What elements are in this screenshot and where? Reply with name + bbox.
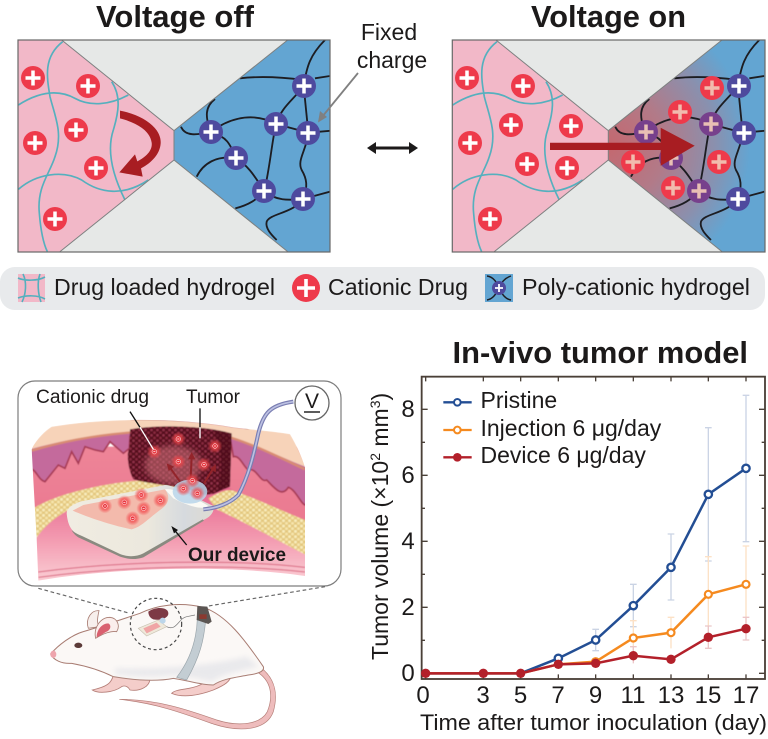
legend text: drug loaded hydrogel: Drug loaded hydrogel	[54, 274, 275, 300]
fixed charges	[199, 74, 320, 211]
y axis title: mm	[367, 408, 393, 453]
backpack unit	[197, 606, 212, 624]
fat layer left	[33, 481, 187, 540]
ears	[87, 611, 99, 628]
x axis tick labels	[416, 682, 759, 709]
panel: voltage off channel	[18, 40, 332, 252]
leader lines	[130, 408, 200, 545]
hind foot	[172, 675, 232, 696]
y axis title: )	[367, 393, 393, 400]
panel: voltage on channel	[452, 40, 766, 252]
chart legend labels: Injection 6 μg/day	[480, 415, 662, 441]
x axis title: Time after tumor inoculation (day)	[420, 710, 767, 735]
icon: drug loaded hydrogel	[18, 274, 45, 302]
line chart: tumor volume	[367, 377, 767, 735]
fixed charges	[634, 74, 756, 211]
mouse illustration	[38, 587, 325, 729]
body	[51, 605, 264, 685]
legend bar	[0, 267, 765, 310]
cationic drugs left	[455, 66, 583, 231]
x axis tick labels: 11	[621, 682, 645, 709]
label: our device: Our device	[188, 545, 286, 566]
device body	[67, 485, 214, 557]
muscle layer	[36, 487, 305, 580]
arrow: reversible	[367, 142, 418, 154]
x axis tick labels: 3	[476, 682, 490, 709]
legend text: poly-cationic hydrogel: Poly-cationic hydrogel	[522, 274, 750, 300]
tumor mass	[128, 426, 232, 495]
series: pristine	[426, 465, 750, 673]
tail	[119, 667, 276, 729]
body shade	[115, 657, 258, 682]
wire to voltage source	[203, 402, 293, 509]
outer skin	[30, 420, 307, 467]
eye and nose	[74, 643, 82, 648]
label: tumor: Tumor	[186, 387, 241, 408]
y axis title: 3	[367, 400, 383, 408]
legend text: cationic drug: Cationic Drug	[328, 274, 468, 300]
device top reservoir	[73, 489, 168, 529]
icon: voltmeter: V	[305, 390, 319, 413]
panel: implanted device inset	[18, 381, 341, 586]
label: cationic drug: Cationic drug	[36, 387, 149, 408]
icon: cationic drug	[292, 274, 320, 302]
release arrowheads	[167, 452, 216, 472]
x axis tick labels: 15	[695, 682, 721, 709]
y axis tick labels: 0	[401, 660, 415, 687]
chart legend labels: Device 6 μg/day	[480, 442, 646, 468]
title: voltage off: Voltage off	[96, 0, 255, 34]
arrow: drug flow	[550, 128, 695, 166]
arrowhead: device leader	[171, 526, 178, 533]
harness strap	[177, 618, 206, 680]
bottom tissue stripes	[38, 562, 305, 577]
y axis tick labels: 2	[401, 594, 415, 621]
series: injection	[426, 581, 749, 673]
drug particles	[98, 432, 222, 526]
dermis layer	[30, 447, 310, 527]
label: fixed charge	[357, 19, 427, 73]
x axis tick labels: 0	[416, 682, 430, 709]
dashed circle	[130, 598, 182, 650]
y axis tick labels	[401, 396, 415, 687]
error bars	[592, 395, 749, 663]
x axis tick labels: 5	[514, 682, 527, 709]
y axis title: 2	[367, 453, 383, 461]
arrow: fixed charge leader	[318, 73, 358, 122]
chart legend labels: Pristine	[480, 387, 557, 413]
chart legend labels	[480, 387, 662, 468]
x axis tick labels: 13	[658, 682, 684, 709]
x axis tick labels: 9	[589, 682, 602, 709]
title: in-vivo tumor model: In-vivo tumor model	[452, 336, 748, 370]
icon: voltmeter	[295, 386, 329, 420]
tissue cross-section illustration	[30, 402, 310, 583]
implanted device in mouse	[138, 620, 167, 636]
label: fixed charge: charge	[357, 47, 427, 73]
fat layer right	[208, 490, 307, 555]
dashed zoom lines	[38, 587, 325, 613]
chart legend markers	[443, 399, 472, 462]
x axis tick labels: 17	[733, 682, 759, 709]
chart frame and ticks	[422, 377, 765, 679]
y axis title: Tumor volume (×10	[367, 461, 393, 660]
label: fixed charge: Fixed	[361, 19, 417, 45]
front feet	[92, 675, 150, 692]
membrane dome	[173, 480, 207, 504]
x axis tick labels: 7	[551, 682, 565, 709]
icon: poly-cationic hydrogel	[485, 274, 513, 302]
y axis tick labels: 6	[401, 462, 415, 489]
epidermis folds	[30, 420, 307, 505]
series: device	[421, 624, 751, 678]
arrow: curved drug blocked	[119, 111, 161, 177]
cationic drugs	[21, 66, 108, 231]
cationic drugs inside hydrogel	[621, 76, 731, 200]
title: voltage on: Voltage on	[531, 0, 686, 34]
release arrows	[169, 456, 213, 483]
y axis tick labels: 8	[401, 396, 415, 423]
y axis tick labels: 4	[401, 528, 415, 555]
